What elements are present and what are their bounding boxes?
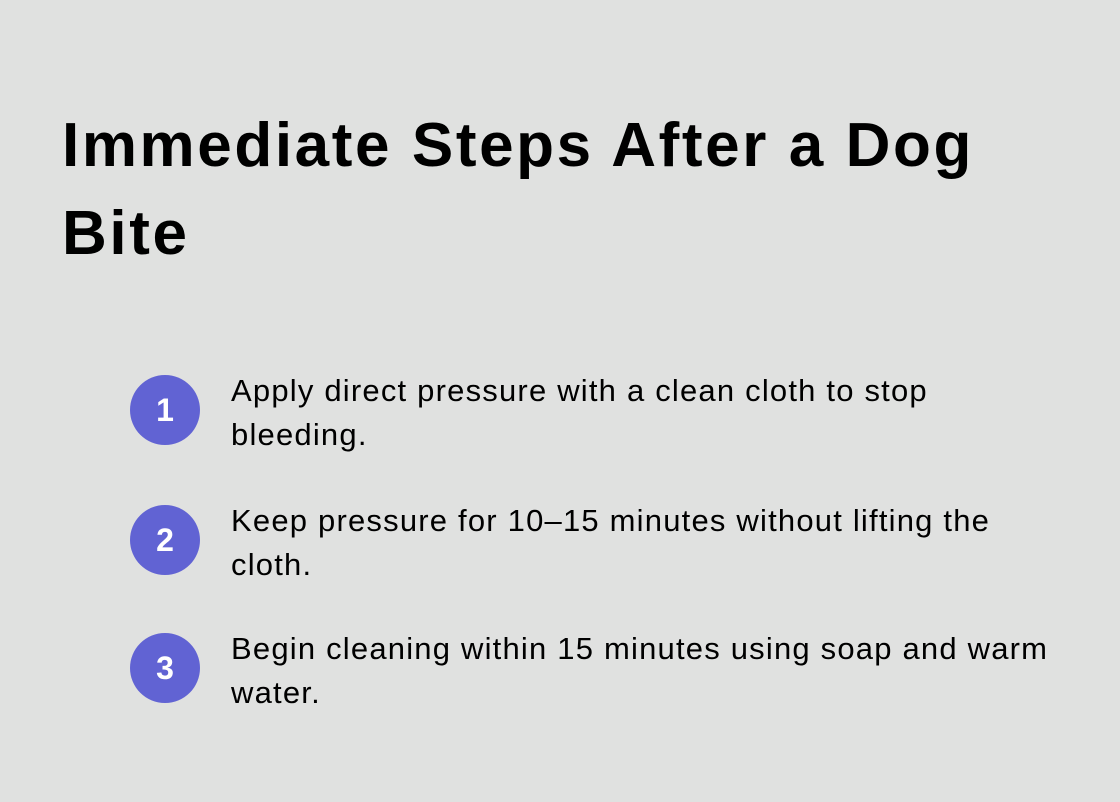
title: Bite bbox=[62, 199, 190, 268]
icon: number 2 circle bbox=[130, 505, 200, 575]
step 3 text: Begin cleaning within 15 minutes using soap and warm bbox=[231, 631, 1048, 666]
step 1 text bbox=[231, 373, 928, 452]
step 2 text: Keep pressure for 10–15 minutes without lifting the bbox=[231, 503, 990, 538]
step 2 text: cloth. bbox=[231, 547, 312, 582]
step 1 bbox=[130, 373, 928, 452]
step 1 text: bleeding. bbox=[231, 417, 368, 452]
icon: number 3 circle: 3 bbox=[156, 650, 174, 686]
step 3 text: water. bbox=[231, 675, 321, 710]
icon: number 1 circle bbox=[130, 375, 200, 445]
step 3 bbox=[130, 631, 1048, 710]
icon: number 2 circle: 2 bbox=[156, 522, 174, 558]
icon: number 1 circle: 1 bbox=[156, 392, 174, 428]
title: Immediate Steps After a Dog bbox=[62, 111, 974, 180]
step 1 text: Apply direct pressure with a clean cloth to stop bbox=[231, 373, 928, 408]
step 3 text bbox=[231, 631, 1048, 710]
title bbox=[62, 111, 974, 268]
step 2 bbox=[130, 503, 990, 582]
icon: number 3 circle bbox=[130, 633, 200, 703]
step 2 text bbox=[231, 503, 990, 582]
